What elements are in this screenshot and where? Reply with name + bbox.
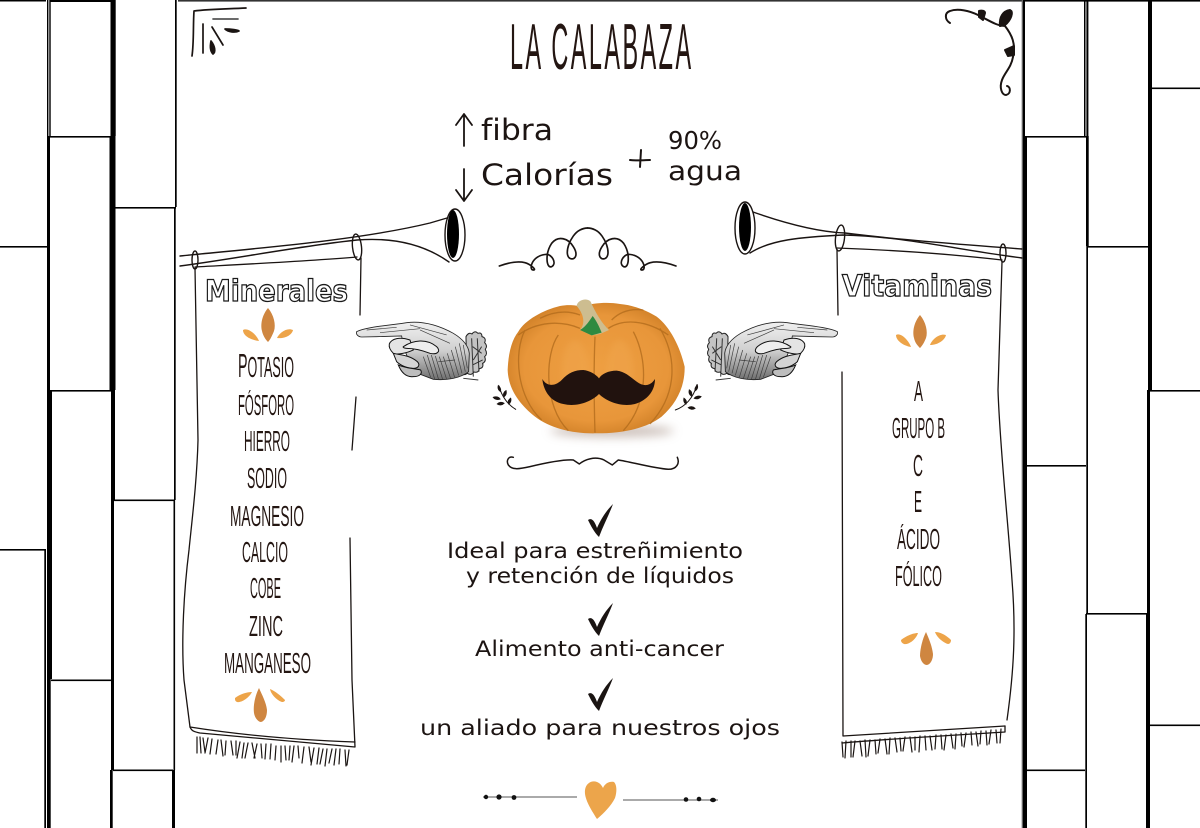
minerals list: COBE: [250, 573, 281, 605]
benefit one: y retención de líquidos: [466, 564, 734, 588]
fringe right: [842, 729, 1001, 758]
vitamins list: [892, 376, 945, 593]
vitamins list: A: [914, 376, 923, 408]
pumpkin with moustache: [508, 300, 685, 437]
minerals list: [224, 347, 311, 680]
heading: Vitaminas: Vitaminas: [842, 269, 992, 303]
shadow: [550, 425, 674, 437]
agua: agua: [668, 156, 742, 187]
minerals list: POTASIO: [238, 347, 294, 384]
icon: heart divider: [483, 781, 718, 819]
vitamins list: ÁCIDO: [897, 523, 940, 556]
icon: leaf ornament top right: [896, 315, 946, 348]
icon: right pointing hand: [708, 322, 838, 380]
icon: check mark two: [588, 603, 613, 636]
title: LA CALABAZA: [510, 12, 691, 84]
index finger and back of hand: [356, 322, 469, 380]
thumb: [403, 341, 439, 354]
nutrition summary: [456, 113, 742, 201]
minerals list: SODIO: [247, 463, 287, 495]
icon: check mark three: [588, 678, 613, 711]
icon: left pointing hand: [356, 322, 486, 380]
minerals list: HIERRO: [244, 426, 290, 458]
minerals list: ZINC: [249, 611, 283, 643]
trumpet and minerals banner: MANGANESO: [224, 648, 311, 680]
icon: check mark one: [588, 504, 613, 537]
icon: leaf ornament top left: [243, 308, 293, 342]
trumpet and minerals banner: [180, 209, 465, 766]
icon: leaf ornament bottom left: [235, 688, 285, 722]
trumpet left: [180, 209, 465, 269]
vitamins list: E: [914, 484, 922, 519]
curled fingers: [389, 338, 413, 354]
benefit two: Alimento anti-cancer: [475, 637, 724, 661]
icon: flourish under pumpkin: [507, 457, 678, 469]
icon: curl ornament above pumpkin: [499, 228, 676, 270]
vitamins list: C: [913, 448, 923, 483]
trumpet and vitamins banner: FÓLICO: [895, 560, 942, 593]
icon: leaf ornament bottom right: [901, 632, 951, 665]
90%: 90%: [668, 126, 722, 155]
banner outline right: [837, 248, 1014, 743]
shading: [367, 325, 467, 380]
trumpet and vitamins banner: [735, 202, 1022, 758]
icon: arrow down: [456, 169, 472, 201]
moustache: [542, 370, 655, 405]
icon: sprig right: [675, 385, 701, 410]
benefits: [420, 504, 780, 740]
pumpkin body: [508, 303, 685, 433]
icon: arrow up: [456, 114, 472, 146]
pumpkin ridges and highlights: [518, 310, 672, 433]
banner outline left: [183, 257, 361, 747]
minerals list: CALCIO: [242, 537, 288, 569]
plus sign: [630, 150, 650, 167]
fringe left: [197, 737, 349, 766]
trumpet right: [735, 202, 1022, 262]
benefit three: un aliado para nuestros ojos: [420, 716, 780, 740]
heading: Minerales: Minerales: [205, 274, 348, 308]
benefit one: [447, 539, 743, 588]
icon: corner ornament top right: [946, 10, 1014, 95]
icon: corner ornament top left: [192, 8, 246, 56]
stem: [577, 300, 609, 335]
minerals list: FÓSFORO: [238, 389, 294, 422]
calorías: Calorías: [481, 158, 613, 192]
cuff: [456, 332, 486, 375]
icon: sprig left: [493, 386, 516, 409]
fibra: fibra: [481, 113, 553, 147]
benefit one: Ideal para estreñimiento: [447, 539, 743, 563]
minerals list: MAGNESIO: [230, 501, 304, 533]
trumpet and vitamins banner: GRUPO B: [892, 413, 945, 445]
